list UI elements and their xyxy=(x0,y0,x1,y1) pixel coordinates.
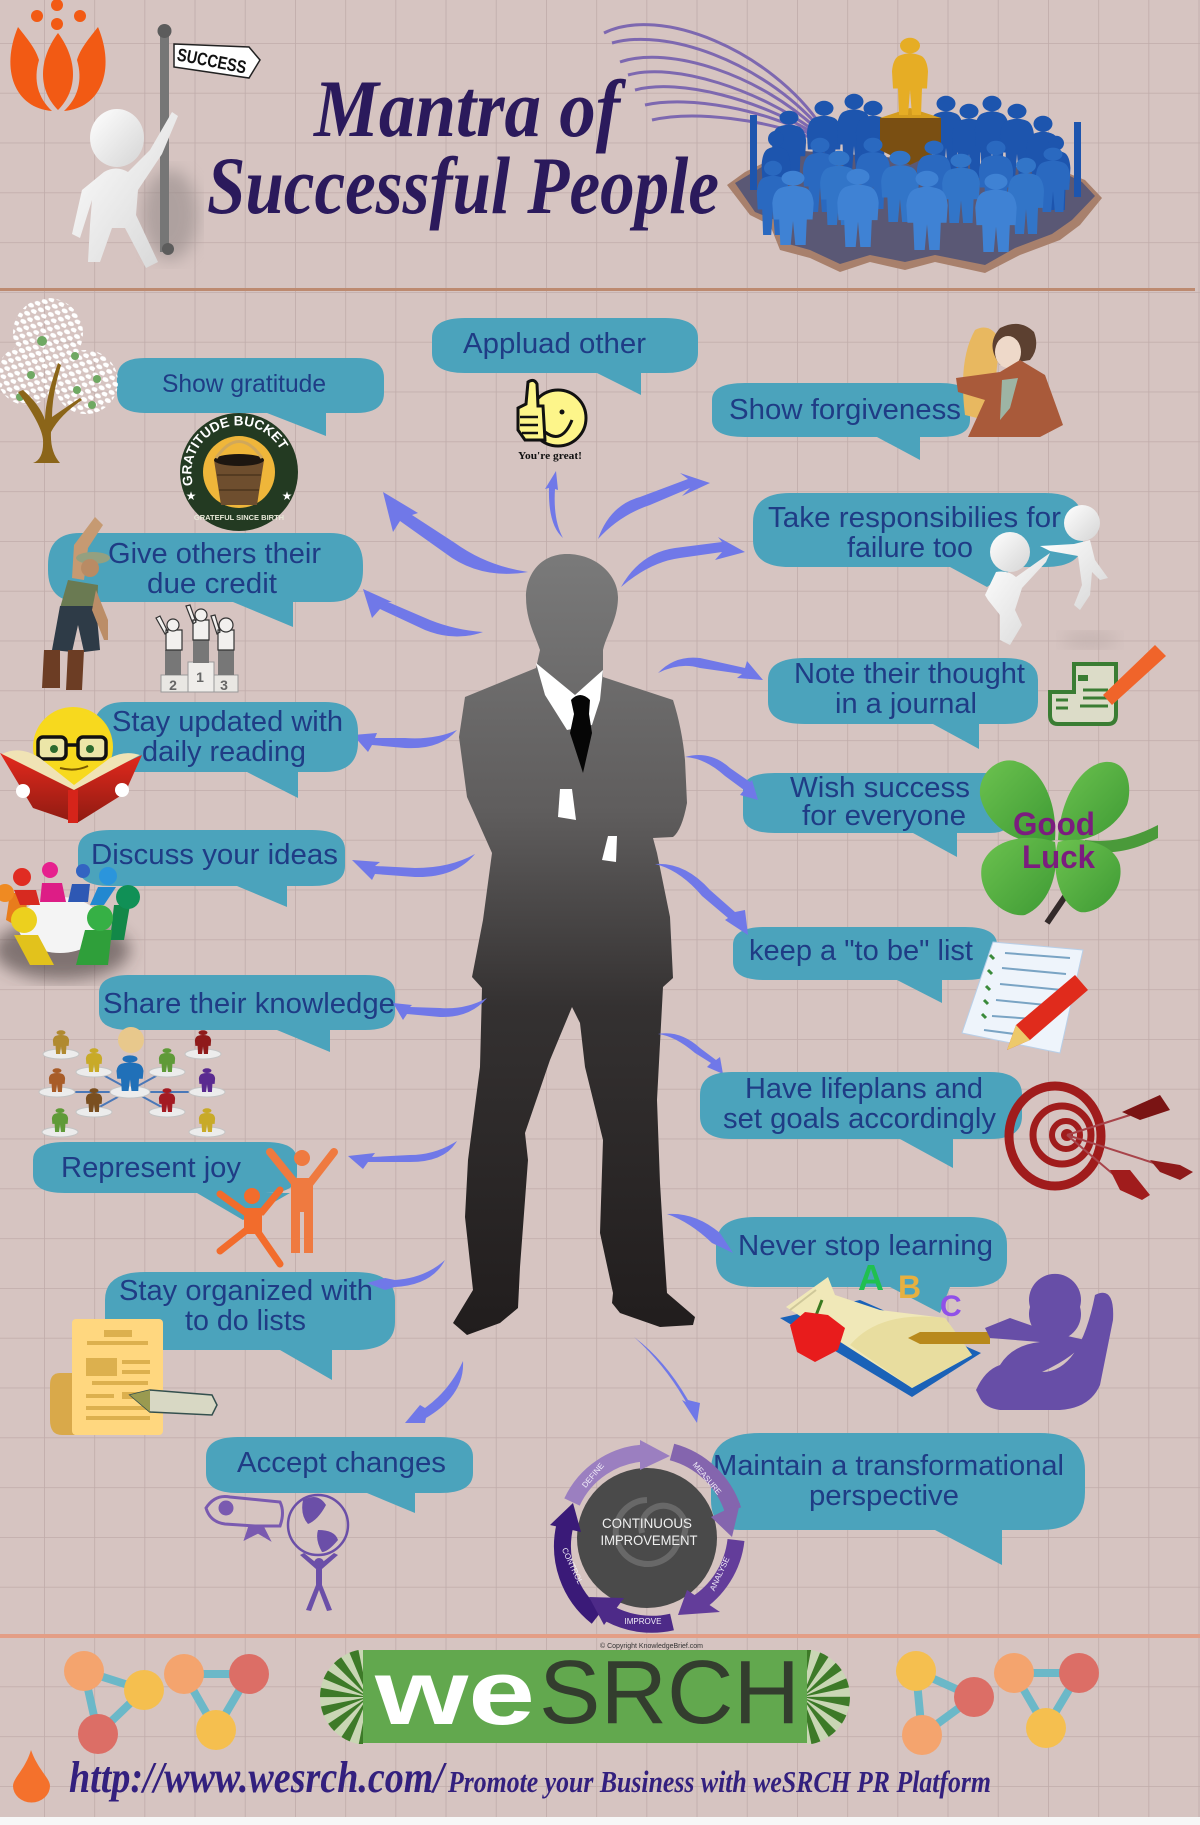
central suited figure xyxy=(453,554,695,1335)
icon: four-leaf clover with good luck xyxy=(980,760,1158,923)
arrow: to lifeplans xyxy=(658,1033,723,1074)
title xyxy=(207,63,719,231)
arrow: to take responsibilities xyxy=(621,537,745,587)
icon: open book, apple, letters and reader xyxy=(780,1257,1113,1410)
arrow: to note thoughts xyxy=(658,658,763,680)
arrow: to stay updated xyxy=(353,730,457,752)
panel: give others credit xyxy=(42,517,363,693)
panel: lifeplans and goals xyxy=(700,1072,1193,1200)
arrow: to accept changes xyxy=(405,1361,463,1423)
panel: give others credit: Give others their xyxy=(108,538,321,570)
panel: note thoughts: in a journal xyxy=(835,688,977,720)
arrow: to share knowledge xyxy=(393,998,487,1020)
icon: crowd around leader xyxy=(727,38,1102,273)
necktie xyxy=(570,695,592,773)
panel: applaud other xyxy=(432,318,698,462)
icon: weSRCH logo: SRCH xyxy=(539,1643,800,1743)
panel: keep to be list xyxy=(733,927,1088,1053)
icon: white-leaf tree xyxy=(0,298,118,463)
arrow: to give credit xyxy=(363,589,483,637)
title: Successful People xyxy=(207,140,719,231)
panel: represent joy xyxy=(33,1142,334,1264)
icon: orange drop xyxy=(13,1750,50,1802)
icon: thumbs up smiley: You're great! xyxy=(518,451,582,462)
icon: left molecule xyxy=(64,1651,269,1754)
icon: open book, apple, letters and reader: C xyxy=(940,1290,962,1323)
website link: http://www.wesrch.com/ xyxy=(69,1753,447,1802)
tagline: Promote your Business with weSRCH PR Platform xyxy=(447,1764,991,1799)
icon: figure with success signpost xyxy=(72,24,260,268)
header panel xyxy=(10,0,1102,273)
panel: keep to be list: keep a "to be" list xyxy=(749,935,973,967)
icon: worker with raised arm xyxy=(42,517,110,690)
panel: discuss your ideas xyxy=(0,830,345,980)
title: Mantra of xyxy=(312,63,627,154)
icon: weSRCH logo xyxy=(320,1642,850,1745)
icon: continuous improvement cycle: CONTROL xyxy=(560,1546,585,1586)
panel: note thoughts xyxy=(768,645,1166,749)
panel: take responsibilities: failure too xyxy=(847,532,973,564)
arrow: to forgiveness xyxy=(598,473,710,539)
icon: continuous improvement cycle xyxy=(550,1440,740,1650)
arrow: to keep list xyxy=(655,864,748,935)
icon: weSRCH logo: we xyxy=(374,1642,535,1744)
icon: two people hugging xyxy=(956,324,1063,437)
icon: continuous improvement cycle: DEFINE xyxy=(580,1461,606,1490)
icon: people network xyxy=(39,1027,225,1137)
icon: two white figures pointing xyxy=(985,505,1118,648)
panel: take responsibilities xyxy=(753,493,1118,648)
panel: share knowledge xyxy=(39,975,395,1137)
arrow: to represent joy xyxy=(348,1141,457,1169)
panel: stay updated: Stay updated with xyxy=(112,706,343,738)
icon: checklist and red pencil xyxy=(962,942,1088,1053)
left shirt cuff xyxy=(558,789,576,820)
panel: applaud other: Appluad other xyxy=(463,328,646,360)
arrow: to show gratitude xyxy=(383,492,528,574)
panel: discuss your ideas: Discuss your ideas xyxy=(91,839,338,871)
icon: continuous improvement cycle: ANALYSE xyxy=(708,1556,731,1592)
icon: jumping adult and child xyxy=(220,1150,334,1264)
right shirt cuff xyxy=(602,836,617,862)
icon: thumbs up smiley xyxy=(518,380,586,462)
shirt collar xyxy=(536,663,603,730)
icon: gratitude bucket badge: ★ xyxy=(282,489,292,503)
panel: show forgiveness xyxy=(712,324,1063,460)
icon: gratitude bucket badge: GRATEFUL SINCE BIRTH xyxy=(194,513,284,522)
icon: figure holding globe xyxy=(288,1495,348,1611)
icon: continuous improvement cycle: © Copyright KnowledgeBrief.com xyxy=(600,1642,703,1650)
icon: gratitude bucket badge xyxy=(180,413,298,531)
panel: share knowledge: Share their knowledge xyxy=(103,988,395,1020)
panel: stay updated xyxy=(0,702,358,823)
panel: represent joy: Represent joy xyxy=(61,1152,241,1184)
panel: give others credit: due credit xyxy=(147,568,277,600)
panel: stay organized: Stay organized with xyxy=(119,1275,373,1307)
icon: winners podium: 1 xyxy=(196,669,204,685)
panel: lifeplans and goals: set goals accordingly xyxy=(723,1103,996,1135)
arrow: to maintain perspective xyxy=(634,1337,700,1423)
icon: open book, apple, letters and reader: A xyxy=(858,1257,884,1298)
icon: winners podium: 3 xyxy=(220,677,228,693)
icon: signal arcs xyxy=(604,25,822,138)
icon: smiley reading book xyxy=(0,707,142,823)
arrow: to discuss ideas xyxy=(352,854,475,880)
panel: lifeplans and goals: Have lifeplans and xyxy=(745,1073,983,1105)
icon: continuous improvement cycle: CONTINUOUS xyxy=(602,1515,692,1531)
arrow: to wish success xyxy=(685,755,758,800)
icon: target with arrows xyxy=(1009,1086,1193,1200)
panel: accept changes xyxy=(206,1437,473,1611)
panel: accept changes: Accept changes xyxy=(237,1447,446,1479)
footer panel xyxy=(13,1642,1099,1802)
icon: figure with success signpost: SUCCESS xyxy=(176,44,248,77)
icon: four-leaf clover with good luck: Good xyxy=(1013,806,1095,842)
panel: wish success: Wish success xyxy=(790,772,970,804)
icon: winners podium xyxy=(156,605,238,693)
panel: stay updated: daily reading xyxy=(142,736,306,768)
icon: orange tulip xyxy=(10,0,106,111)
icon: gratitude bucket badge: GRATITUDE BUCKET xyxy=(182,416,288,486)
icon: continuous improvement cycle: IMPROVEMENT xyxy=(600,1532,698,1548)
panel: wish success: for everyone xyxy=(802,800,966,832)
panel: show gratitude: Show gratitude xyxy=(162,371,326,398)
panel: never stop learning: Never stop learning xyxy=(738,1230,993,1262)
panel: maintain perspective xyxy=(550,1433,1085,1650)
icon: meeting round table xyxy=(0,862,140,980)
panel: stay organized xyxy=(50,1272,395,1435)
panel: show forgiveness: Show forgiveness xyxy=(729,394,961,426)
icon: right molecule xyxy=(896,1651,1099,1755)
icon: four-leaf clover with good luck: Luck xyxy=(1022,839,1095,875)
icon: gratitude bucket badge: ★ xyxy=(186,489,196,503)
icon: document and pencil xyxy=(50,1319,217,1435)
panel: wish success xyxy=(743,760,1158,923)
icon: open book, apple, letters and reader: B xyxy=(898,1269,921,1305)
panel: stay organized: to do lists xyxy=(185,1305,306,1337)
icon: winners podium: 2 xyxy=(169,677,177,693)
panel: take responsibilities: Take responsibilies for xyxy=(768,502,1061,534)
icon: green document with orange pen xyxy=(1050,645,1166,724)
arrow: to applaud xyxy=(545,471,563,538)
arrow: to stay organized xyxy=(367,1260,445,1290)
panel: never stop learning xyxy=(716,1217,1113,1410)
panel: show gratitude xyxy=(0,298,384,531)
arrow: to never stop learning xyxy=(667,1214,733,1253)
panel: maintain perspective: perspective xyxy=(809,1480,959,1512)
panel: note thoughts: Note their thought xyxy=(794,658,1025,690)
icon: continuous improvement cycle: MEASURE xyxy=(691,1460,723,1496)
icon: continuous improvement cycle: IMPROVE xyxy=(625,1617,661,1626)
panel: maintain perspective: Maintain a transformational xyxy=(713,1450,1064,1482)
icon: diploma scroll xyxy=(206,1496,282,1538)
